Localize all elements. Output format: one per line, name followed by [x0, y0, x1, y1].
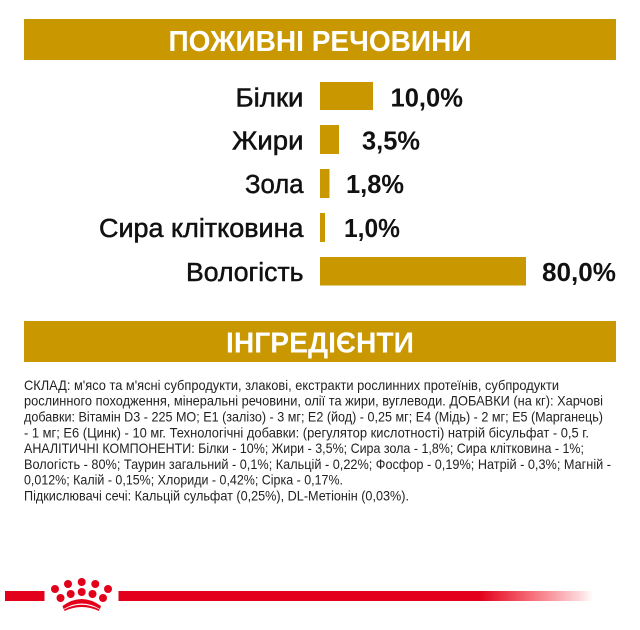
- row: protein: Білки: [236, 84, 304, 112]
- text block: composition: АНАЛІТИЧНІ КОМПОНЕНТИ: Білки - 10%; Жири - 3,5%; Сира зола - 1,8%; Сира клітковина - 1%;: [24, 441, 584, 456]
- footer band: right red stripe fading out: [118, 591, 593, 601]
- text block: composition: Підкислювачі сечі: Кальцій сульфат (0,25%), DL-Метіонін (0,03%).: [24, 488, 409, 504]
- panel: nutrients heading banner: [24, 19, 616, 60]
- text block: composition: рослинного походження, мінеральні речовини, олії та жири, вуглеводи. ДОБАВКИ (на кг): Харчові: [24, 394, 603, 409]
- row: ash: 1,8%: [346, 171, 404, 199]
- row: crude fibre: Сира клітковина: [99, 215, 304, 243]
- row: fat: [232, 125, 420, 156]
- bar chart: nutrients: [99, 82, 616, 287]
- text block: composition: - 1 мг; Е6 (Цинк) - 10 мг. Технологічні добавки: (регулятор кислотності) натрій бісульфат - 0,5 г.: [24, 425, 589, 440]
- row: moisture: 80,0%: [542, 259, 616, 287]
- row: moisture: Вологість: [186, 259, 304, 287]
- text block: composition: [24, 378, 611, 504]
- text block: composition: 0,012%; Калій - 0,15%; Хлориди - 0,42%; Сірка - 0,17%.: [24, 473, 343, 488]
- row: ash: [245, 169, 404, 199]
- row: crude fibre: [99, 213, 400, 243]
- panel: ingredients heading banner: ІНГРЕДІЄНТИ: [226, 328, 414, 360]
- panel: ingredients heading banner: [24, 321, 616, 362]
- row: ash: Зола: [245, 171, 304, 199]
- text block: composition: добавки: Вітамін D3 - 225 МО; Е1 (залізо) - 3 мг; Е2 (йод) - 0,25 мг; Е4 (Мідь) - 2 мг; Е5 (Марганець): [24, 410, 603, 424]
- row: fat: Жири: [232, 128, 304, 156]
- row: protein: 10,0%: [390, 84, 463, 112]
- row: crude fibre: 1,0%: [344, 215, 400, 243]
- row: fat: 3,5%: [362, 128, 420, 156]
- row: moisture: [186, 257, 616, 287]
- icon: Royal Canin crown logo: [51, 578, 112, 611]
- row: protein: [236, 82, 463, 112]
- panel: nutrients heading banner: ПОЖИВНІ РЕЧОВИНИ: [168, 26, 472, 58]
- text block: composition: СКЛАД: м'ясо та м'ясні субпродукти, злакові, екстракти рослинних протеїнів, субпродукти: [24, 378, 559, 393]
- footer band: left red stripe: [5, 591, 44, 601]
